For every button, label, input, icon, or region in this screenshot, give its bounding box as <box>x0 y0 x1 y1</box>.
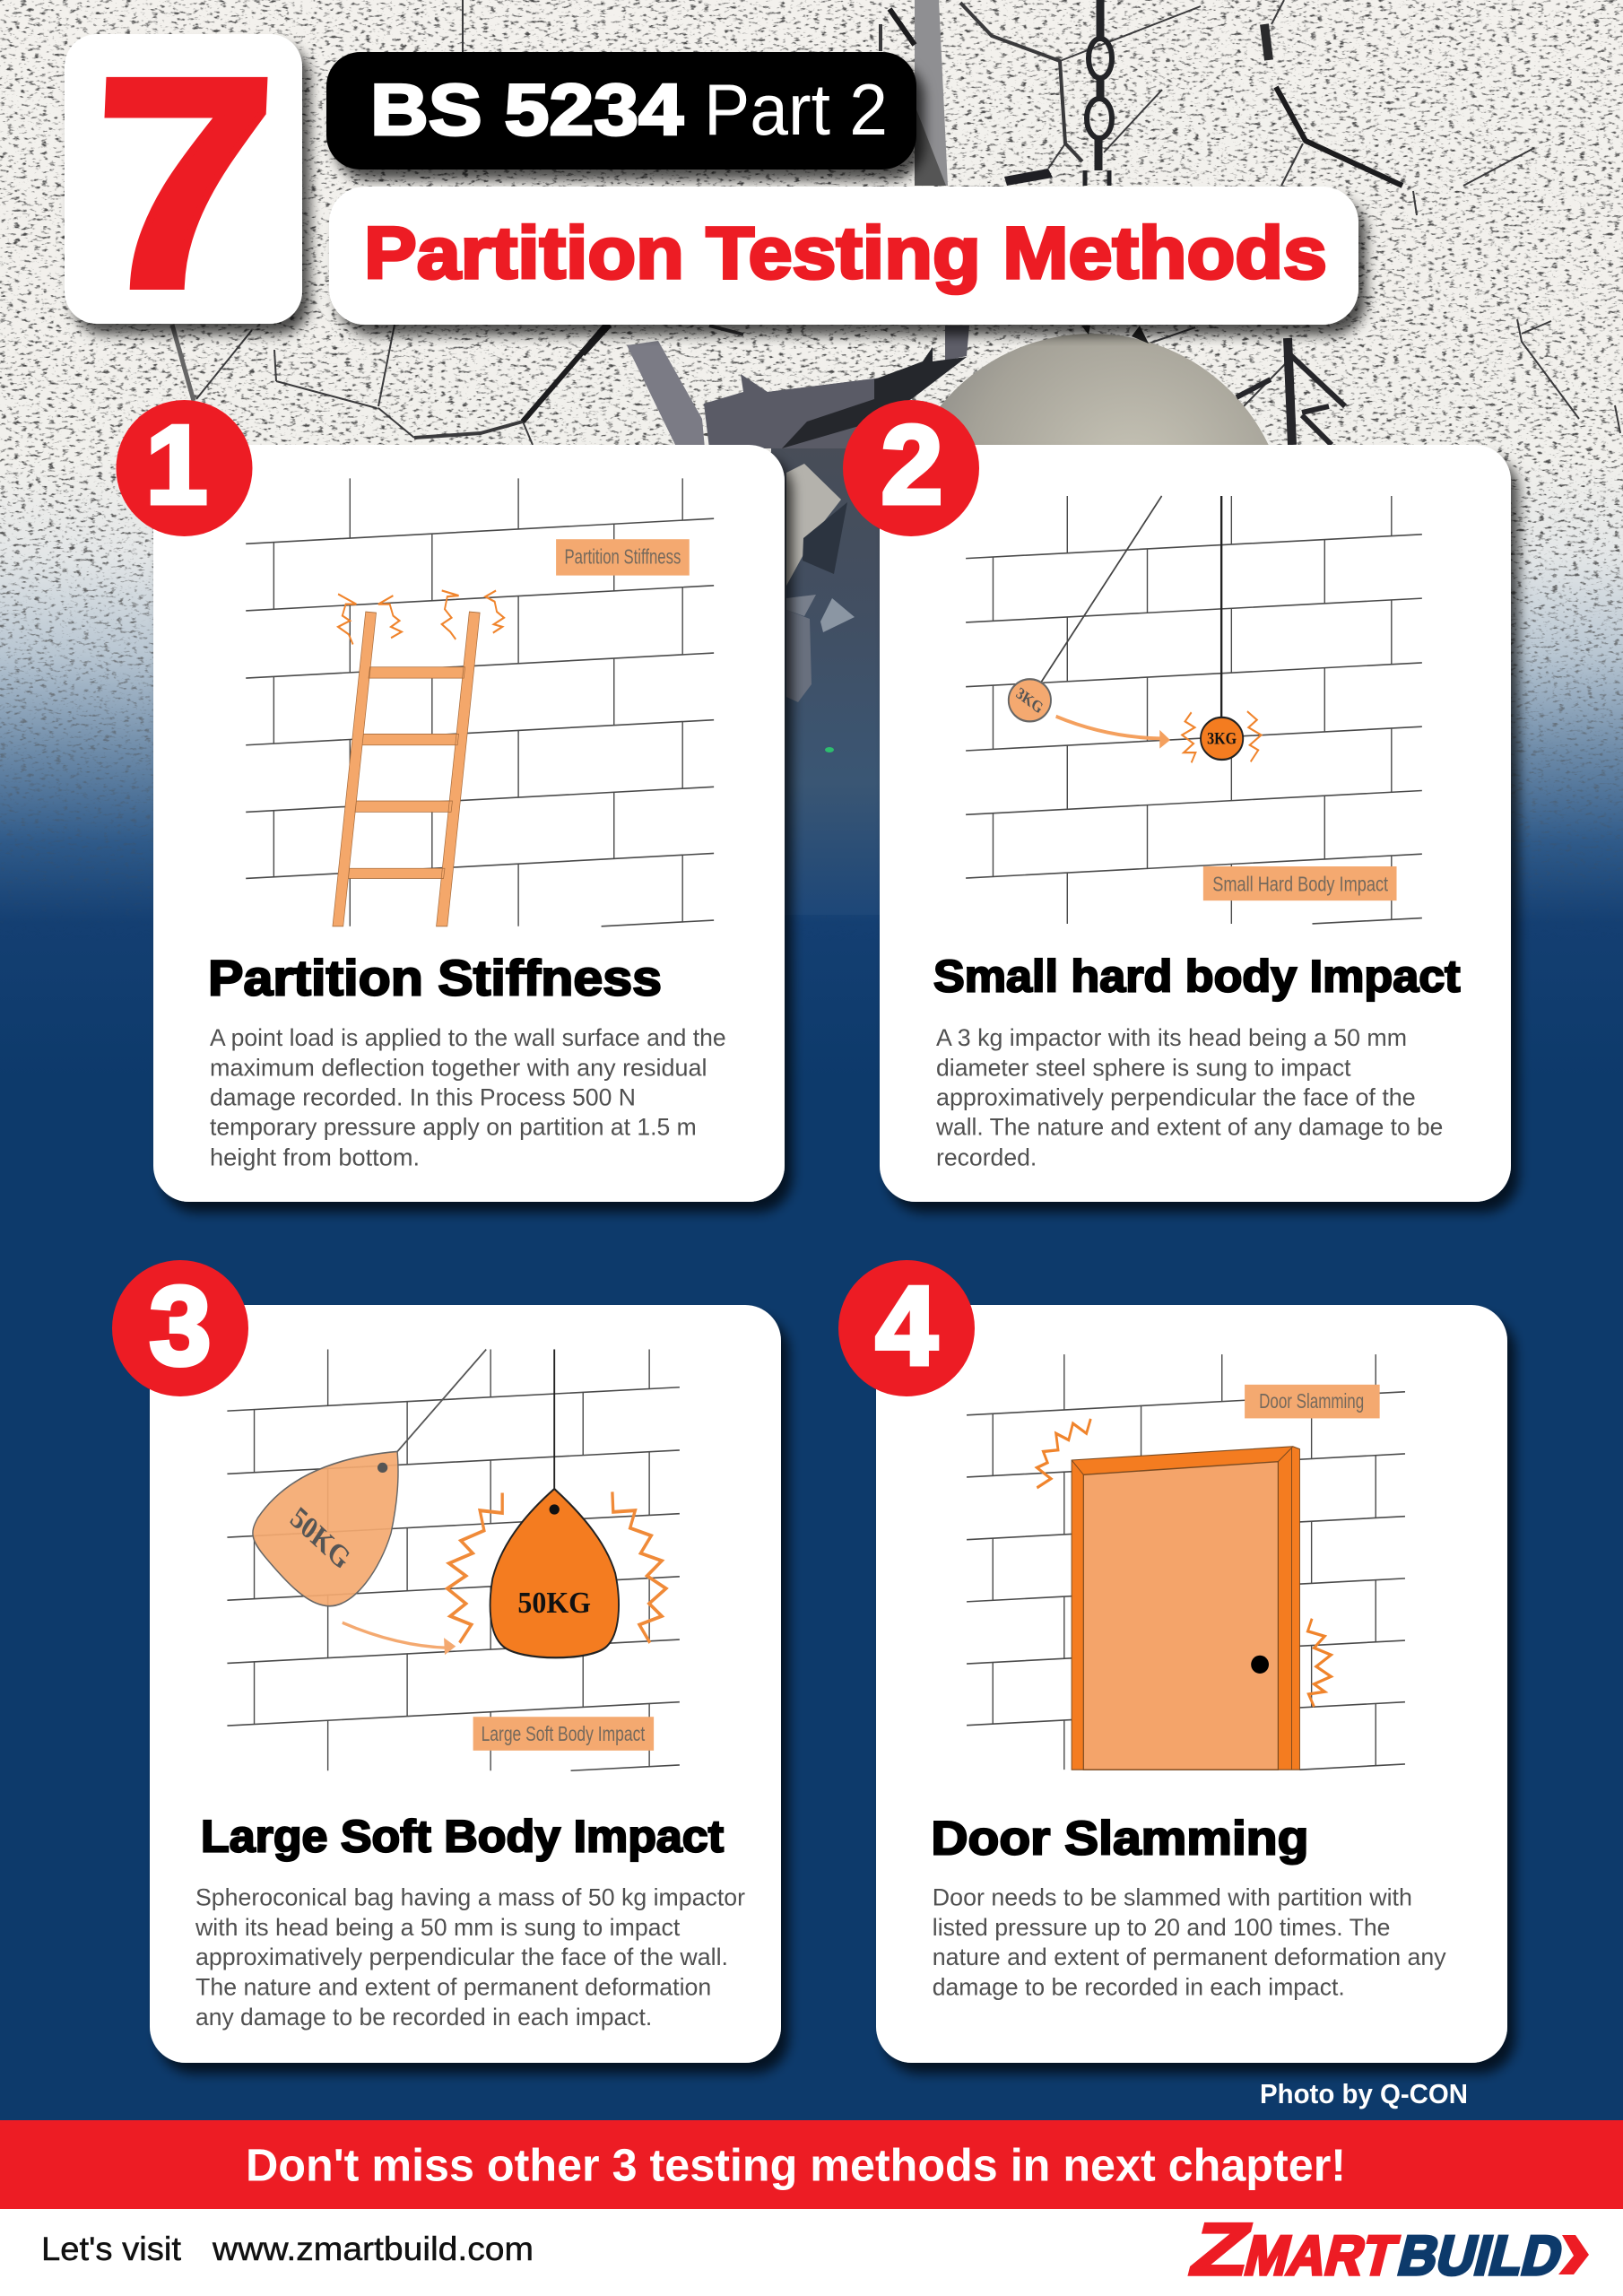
heading: Partition Stiffness <box>208 950 662 1006</box>
hanging chain <box>1085 0 1112 186</box>
illustration: 50 kg bag <box>227 1350 680 1770</box>
body text <box>210 1024 726 1170</box>
body text: any damage to be recorded in each impact. <box>195 2004 652 2031</box>
body text: listed pressure up to 20 and 100 times. The <box>933 1914 1390 1941</box>
illustration: ladder against wall: Partition Stiffness <box>565 544 681 569</box>
heading: Door Slamming <box>931 1812 1308 1865</box>
illustration: 3 kg pendulum: 3KG <box>1013 683 1046 718</box>
logo: ZmartBuild <box>1184 2208 1589 2291</box>
panel 2: Small hard body Impact <box>880 445 1511 1202</box>
body text: recorded. <box>936 1144 1037 1170</box>
illustration: door in wall: Door Slamming <box>1259 1389 1364 1413</box>
number badge 2 <box>843 400 979 536</box>
logo: ZmartBuild: Z <box>1184 2208 1259 2291</box>
red banner <box>0 2120 1623 2209</box>
wall cracks <box>172 0 1620 445</box>
heading: Large Soft Body Impact <box>201 1812 724 1862</box>
title pill: BS 5234 Part 2: Part 2 <box>704 70 888 151</box>
website link: www.zmartbuild.com <box>212 2231 534 2267</box>
title pill: BS 5234 Part 2: BS 5234 <box>370 70 683 151</box>
website link: Let's visit <box>41 2231 182 2267</box>
number badge 1 <box>117 400 253 536</box>
illustration: door in wall <box>967 1354 1405 1770</box>
body text <box>935 1024 1443 1170</box>
logo: ZmartBuild: BUILD <box>1393 2225 1569 2287</box>
heading: Small hard body Impact <box>933 952 1461 1002</box>
number badge 3: 3 <box>150 1265 211 1388</box>
panel 3: Large Soft Body Impact <box>150 1305 781 2063</box>
body text: approximatively perpendicular the face of the <box>936 1084 1416 1111</box>
body text: maximum deflection together with any residual <box>210 1055 707 1082</box>
illustration: 50 kg bag: 50KG <box>517 1586 591 1620</box>
body text <box>933 1884 1446 2001</box>
body text: The nature and extent of permanent deformation <box>195 1974 711 2001</box>
body text: wall. The nature and extent of any damage to be <box>935 1114 1443 1141</box>
number badge 2: 2 <box>881 404 942 527</box>
illustration: ladder against wall <box>246 478 714 926</box>
number badge 3 <box>112 1260 248 1396</box>
body text: Spheroconical bag having a mass of 50 kg impactor <box>195 1884 745 1911</box>
number badge 4: 4 <box>876 1265 938 1388</box>
illustration: 3 kg pendulum: Small Hard Body Impact <box>1212 872 1388 896</box>
background: cracked concrete wall fading to navy <box>0 0 1623 927</box>
red banner: Don't miss other 3 testing methods in next chapter! <box>246 2140 1346 2191</box>
body text: A point load is applied to the wall surface and the <box>210 1024 726 1051</box>
logo: ZmartBuild: MART <box>1239 2225 1403 2287</box>
illustration: 3 kg pendulum <box>966 496 1422 924</box>
wrecking ball <box>897 334 1288 725</box>
wall hole and rubble <box>627 326 969 915</box>
cracks right of ball <box>1288 338 1292 445</box>
body text: temporary pressure apply on partition at 1.5 m <box>210 1114 697 1141</box>
body text: nature and extent of permanent deformation any <box>933 1944 1446 1970</box>
number badge 1: 1 <box>146 404 207 527</box>
body text: diameter steel sphere is sung to impact <box>936 1055 1351 1082</box>
illustration: 3 kg pendulum: 3KG <box>1207 729 1237 748</box>
illustration: 50 kg bag: 50KG <box>285 1500 356 1576</box>
number badge 4 <box>838 1260 975 1396</box>
title pill: BS 5234 Part 2 <box>326 52 916 170</box>
illustration: 50 kg bag: Large Soft Body Impact <box>482 1722 645 1746</box>
title pill: Partition Testing Methods: Partition Testing Methods <box>364 213 1327 294</box>
body text: with its head being a 50 mm is sung to impact <box>195 1914 681 1941</box>
website link <box>41 2231 534 2267</box>
title pill: Partition Testing Methods <box>329 187 1358 325</box>
grey smear at top <box>915 0 948 186</box>
body text: damage recorded. In this Process 500 N <box>210 1084 636 1111</box>
body text: damage to be recorded in each impact. <box>933 1974 1345 2001</box>
body text: approximatively perpendicular the face of the wall. <box>195 1944 728 1970</box>
footer <box>0 2208 1623 2296</box>
number badge: big 7: 7 <box>84 15 281 350</box>
panel 4: Door Slamming <box>876 1305 1507 2063</box>
body text: Door needs to be slammed with partition with <box>933 1884 1412 1911</box>
panel 1: Partition Stiffness <box>153 445 785 1202</box>
photo credit: Photo by Q-CON <box>1260 2078 1468 2109</box>
body text <box>195 1884 745 2031</box>
body text: A 3 kg impactor with its head being a 50 mm <box>936 1024 1407 1051</box>
body text: height from bottom. <box>210 1144 420 1170</box>
